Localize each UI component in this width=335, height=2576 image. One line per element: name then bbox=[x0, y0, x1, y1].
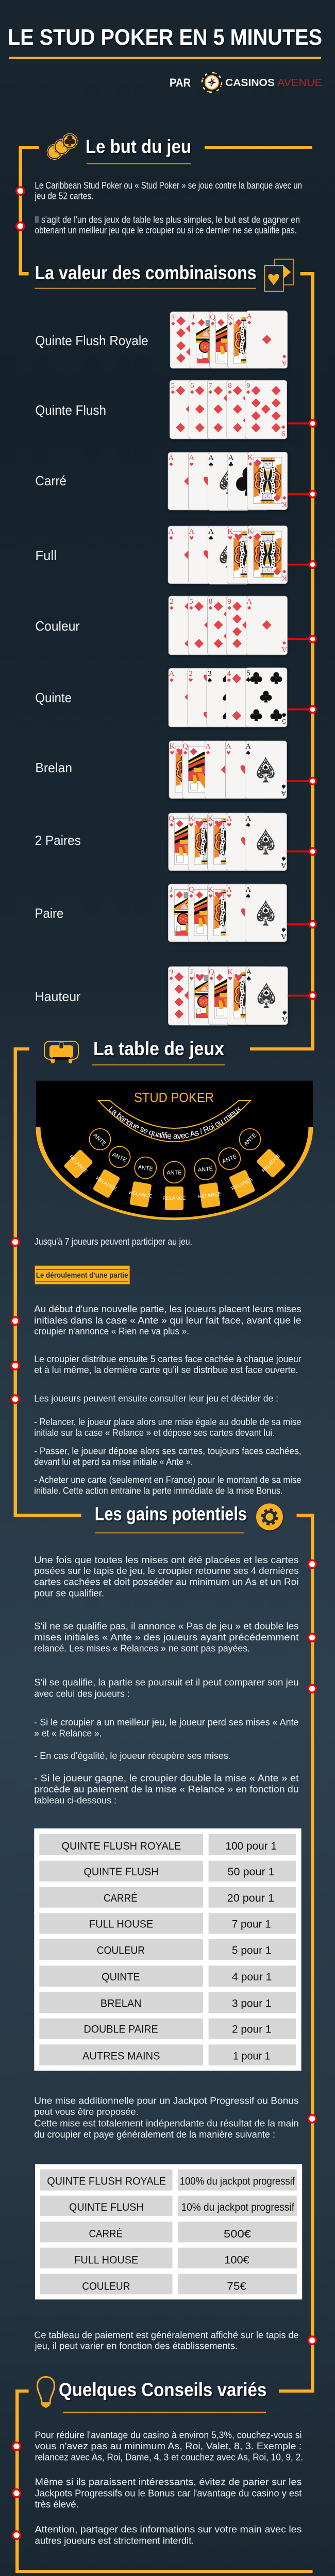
table: paiements jackpot: 500€ bbox=[224, 2228, 251, 2240]
text block: résolution: relancé. Les mises « Relances » ne sont pas payées. bbox=[34, 1643, 250, 1654]
relance boxes: RELANCE bbox=[230, 1177, 254, 1192]
hand: Quinte Flush: 8 bbox=[228, 382, 232, 390]
label: Quinte Flush Royale: Quinte Flush Royale bbox=[35, 333, 148, 348]
hand: Full: A bbox=[189, 528, 194, 536]
ante circles: ANTE bbox=[111, 1151, 127, 1163]
hand: Full: K bbox=[227, 528, 233, 536]
text block: conseils bbox=[35, 2429, 303, 2546]
table: paiements relance: 1 pour 1 bbox=[233, 2050, 270, 2062]
table: paiements relance: QUINTE FLUSH bbox=[83, 1866, 159, 1878]
relance boxes bbox=[62, 1147, 288, 1210]
hand: Brelan: A bbox=[205, 742, 211, 751]
table: paiements relance: 5 pour 1 bbox=[232, 1945, 271, 1957]
hand: Quinte Flush: 9 bbox=[246, 382, 250, 390]
heading: Quelques Conseils variés bbox=[59, 2379, 266, 2400]
hand: Carré: A bbox=[169, 454, 174, 462]
hand: Carré: K bbox=[247, 453, 253, 462]
heading underline bbox=[63, 2412, 266, 2413]
hand: Couleur: 2 bbox=[170, 598, 174, 606]
icon: poker chips bbox=[46, 133, 78, 160]
hand: Brelan: Q bbox=[182, 742, 188, 751]
hand: 2 Paires: A bbox=[226, 815, 232, 823]
hand: Hauteur: J bbox=[190, 968, 193, 976]
hand: Carré: K bbox=[281, 500, 287, 508]
table: paiements jackpot: FULL HOUSE bbox=[74, 2254, 138, 2266]
hand: Paire: A bbox=[245, 886, 251, 894]
label: 2 Paires: 2 Paires bbox=[35, 833, 81, 848]
label: Full: Full bbox=[35, 548, 57, 563]
hand: Quinte Flush bbox=[170, 380, 287, 439]
text block: déroulement: initiale sur la case « Relance » et dépose ses cartes devant lui. bbox=[34, 1427, 275, 1438]
hand: Quinte: 5 bbox=[282, 717, 286, 725]
heading underline bbox=[92, 1064, 225, 1065]
text block: résolution: cartes cachées et doit posséder au minimum un As et un Roi bbox=[34, 1577, 299, 1587]
label: Hauteur: Hauteur bbox=[35, 989, 81, 1004]
hand: Carré bbox=[168, 452, 288, 511]
hand: Couleur bbox=[169, 596, 288, 655]
table: paiements relance: AUTRES MAINS bbox=[82, 2050, 160, 2062]
text block: déroulement: - Passer, le joueur dépose alors ses cartes, toujours faces cachées, bbox=[34, 1446, 301, 1456]
hand: Quinte Flush: 7 bbox=[209, 382, 213, 390]
relance boxes: RELANCE bbox=[198, 1191, 222, 1200]
timeline nodes bbox=[11, 1238, 19, 1403]
heading underline bbox=[35, 288, 256, 289]
panel: les gains potentiels bbox=[34, 1503, 316, 2351]
hand: Full: A bbox=[169, 528, 174, 536]
relance boxes: RELANCE bbox=[68, 1154, 88, 1174]
text block: conseils: relancez avec As, Roi, Dame, 4, 3 et couchez avec As, Roi, 10, 9, 2. bbox=[35, 2452, 303, 2463]
table: paiements relance: 3 pour 1 bbox=[232, 1997, 271, 2009]
connectors and timeline nodes bbox=[287, 420, 316, 999]
hand: Full bbox=[168, 526, 288, 584]
relance boxes: RELANCE bbox=[129, 1190, 153, 1199]
table: paiements jackpot: 75€ bbox=[227, 2280, 246, 2292]
text: joueurs: Jusqu'à 7 joueurs peuvent participer au jeu. bbox=[35, 1236, 192, 1247]
label: Quinte: Quinte bbox=[35, 690, 72, 705]
hand: Full: A bbox=[208, 528, 214, 536]
ante circles: ANTE bbox=[138, 1164, 154, 1173]
table: paiements jackpot bbox=[35, 2164, 302, 2299]
text block: conseils: Jackpots Progressifs ou le Bonus car l'avantage du casino y est bbox=[35, 2487, 301, 2498]
hand: Paire: A bbox=[281, 932, 287, 940]
table: paiements relance: QUINTE FLUSH ROYALE bbox=[61, 1840, 181, 1852]
text block: conseils: Attention, partager des informations sur votre main avec les bbox=[35, 2524, 301, 2535]
table: paiements relance: 20 pour 1 bbox=[227, 1892, 274, 1904]
hand: 2 Paires: K bbox=[189, 815, 194, 823]
table: paiements relance: DOUBLE PAIRE bbox=[83, 2023, 158, 2035]
text block: résolution: Une fois que toutes les mises ont été placées et les cartes bbox=[34, 1554, 299, 1565]
hand: Quinte Flush Royale: Q bbox=[210, 313, 215, 321]
text block: résolution: S'il se qualifie, la partie se poursuit et il peut comparer son jeu bbox=[34, 1677, 299, 1688]
text block: déroulement: - Relancer, le joueur place alors une mise égale au double de sa mise bbox=[34, 1416, 301, 1427]
hand: 2 Paires: A bbox=[245, 815, 251, 823]
table: paiements relance: 7 pour 1 bbox=[232, 1919, 271, 1930]
text block: résolution: - Si le croupier a un meilleur jeu, le joueur perd ses mises « Ante bbox=[34, 1717, 299, 1727]
relance boxes: RELANCE bbox=[95, 1176, 118, 1192]
hand: Hauteur: K bbox=[227, 968, 233, 976]
hand: Paire: J bbox=[170, 886, 173, 894]
hand: Paire: Q bbox=[189, 886, 194, 894]
hand: Hauteur: 9 bbox=[170, 968, 173, 976]
table: paiements relance: 100 pour 1 bbox=[225, 1840, 277, 1852]
hand: Quinte bbox=[169, 668, 287, 727]
text block: conseils: très élevé. bbox=[35, 2499, 79, 2510]
ante circles: ANTE bbox=[92, 1132, 107, 1147]
text block: déroulement: initiales dans la case « Ante » qui leur fait face, avant que le bbox=[34, 1315, 301, 1326]
hand: Brelan: A bbox=[281, 789, 287, 797]
text block: déroulement: croupier n'annonce « Rien ne va plus ». bbox=[34, 1326, 189, 1336]
heading: La table de jeux bbox=[93, 1038, 224, 1059]
hand: Couleur: 5 bbox=[189, 598, 193, 606]
table: paiements relance bbox=[34, 1828, 301, 2071]
text block: résolution: procède au paiement de la mise « Relance » en fonction du bbox=[34, 1784, 299, 1794]
text block: résolution: - Si le joueur gagne, le croupier double la mise « Ante » et bbox=[34, 1772, 299, 1783]
hand: Quinte Flush Royale: J bbox=[192, 313, 195, 321]
title rule bbox=[9, 57, 321, 59]
text block: résolution: pour se qualifier. bbox=[34, 1588, 104, 1598]
table: paiements jackpot: 100% du jackpot progressif bbox=[180, 2176, 295, 2188]
text block: jackpot: peut vous être proposée. bbox=[34, 2106, 139, 2117]
hand: Paire: K bbox=[208, 886, 213, 894]
text block: résolution bbox=[34, 1554, 299, 1806]
text block: conseils: vous n'avez pas au minimum As, Roi, Valet, 8, 3. Exemple : bbox=[35, 2441, 301, 2451]
text block: jackpot: du croupier et paye généralement de la manière suivante : bbox=[34, 2129, 275, 2140]
text block: jeu de 52 cartes. bbox=[35, 191, 94, 201]
heading underline bbox=[87, 163, 191, 164]
hand: Paire: A bbox=[226, 886, 232, 894]
icon: gear bbox=[256, 1503, 283, 1530]
text block: affichage bbox=[34, 2329, 299, 2351]
heading: La valeur des combinaisons bbox=[35, 262, 257, 283]
hand: Quinte: A bbox=[169, 670, 175, 678]
ante circles: ANTE bbox=[243, 1132, 258, 1147]
label: Paire: Paire bbox=[35, 906, 63, 921]
table: paiements relance: FULL HOUSE bbox=[89, 1919, 153, 1930]
table: paiements relance: CARRÉ bbox=[104, 1892, 138, 1904]
label: Quinte Flush: Quinte Flush bbox=[35, 402, 106, 418]
hand: Quinte: 4 bbox=[227, 670, 231, 678]
hand: Quinte Flush Royale: 10 bbox=[171, 313, 175, 321]
hand: Quinte Flush: 6 bbox=[190, 382, 194, 390]
hand: Quinte: 3 bbox=[208, 670, 212, 678]
diagram: poker table bbox=[36, 1081, 313, 1220]
hand: Brelan: A bbox=[245, 742, 251, 751]
hand: Full: K bbox=[247, 528, 253, 536]
hand: Brelan bbox=[169, 741, 287, 799]
text block: déroulement: Au début d'une nouvelle partie, les joueurs placent leurs mises bbox=[34, 1303, 301, 1314]
panel: le but du jeu bbox=[16, 133, 302, 235]
text block: conseils: autres joueurs est strictement interdit. bbox=[35, 2535, 194, 2546]
hand: 2 Paires bbox=[169, 813, 287, 871]
hand: Hauteur bbox=[168, 967, 288, 1025]
table: paiements relance: QUINTE bbox=[102, 1971, 140, 1983]
table title: STUD POKER bbox=[134, 1090, 214, 1105]
header bbox=[8, 25, 322, 93]
text block: affichage: Ce tableau de paiement est généralement affiché sur le tapis de bbox=[34, 2329, 299, 2340]
text block: déroulement: Le croupier distribue ensuite 5 cartes face cachée à chaque joueur bbox=[34, 1353, 301, 1364]
text block: Il s'agit de l'un des jeux de table les plus simples, le but est de gagner en bbox=[35, 214, 300, 225]
brand name: CASINOS bbox=[225, 77, 275, 89]
text block: jackpot bbox=[34, 2095, 299, 2140]
relance boxes: RELANCE bbox=[163, 1196, 186, 1201]
table: paiements relance: 4 pour 1 bbox=[232, 1971, 272, 1983]
hand: Couleur: 8 bbox=[209, 598, 212, 606]
table: paiements jackpot: QUINTE FLUSH ROYALE bbox=[47, 2176, 166, 2188]
text block: résolution: posées sur le tapis de jeu, le croupier retourne ses 4 dernières bbox=[34, 1565, 299, 1576]
ante circles bbox=[85, 1124, 265, 1183]
text block: jackpot: Une mise additionnelle pour un Jackpot Progressif ou Bonus bbox=[34, 2095, 299, 2106]
text block: déroulement: devant lui et perd sa mise initiale « Ante ». bbox=[34, 1456, 193, 1467]
timeline nodes bbox=[308, 1560, 316, 2344]
text block: affichage: jeu, il peut varier en fonction des établissements. bbox=[35, 2340, 238, 2351]
text block: déroulement: et à lui même, la dernière carte qu'il se distribue est face ouverte. bbox=[34, 1364, 298, 1375]
brand name accent: AVENUE bbox=[277, 77, 322, 89]
hand: Quinte Flush Royale: A bbox=[281, 359, 287, 367]
text block: jackpot: Cette mise est totalement indépendante du résultat de la main bbox=[34, 2117, 299, 2128]
hand: 2 Paires: K bbox=[208, 815, 213, 823]
text block: déroulement: - Acheter une carte (seulement en France) pour le montant de sa mise bbox=[34, 1474, 301, 1485]
text block bbox=[35, 180, 302, 235]
heading: Les gains potentiels bbox=[95, 1503, 247, 1524]
text block: résolution: » et « Relance ». bbox=[34, 1727, 102, 1738]
text block: résolution: tableau ci-dessous : bbox=[34, 1795, 116, 1806]
table: paiements relance: COULEUR bbox=[97, 1945, 145, 1957]
hand: Couleur: A bbox=[246, 598, 252, 606]
hand: Hauteur: Q bbox=[209, 968, 214, 976]
table: paiements relance: 50 pour 1 bbox=[228, 1866, 275, 1878]
table: paiements jackpot: 10% du jackpot progressif bbox=[181, 2201, 294, 2213]
hand: Couleur: 9 bbox=[227, 598, 231, 606]
text block: résolution: - En cas d'égalité, le joueur récupère ses mises. bbox=[34, 1750, 231, 1761]
timeline nodes bbox=[12, 2443, 21, 2539]
hand: Quinte Flush Royale bbox=[170, 311, 288, 368]
timeline nodes bbox=[16, 187, 24, 230]
hand: 2 Paires: Q bbox=[169, 815, 174, 823]
qualification band: La banque se qualifie avec As / Roi ou mieux bbox=[108, 1106, 242, 1139]
ante circles: ANTE bbox=[222, 1154, 238, 1165]
heading: Le but du jeu bbox=[86, 136, 191, 157]
hand: 2 Paires: A bbox=[281, 861, 287, 869]
hand: Quinte Flush: 5 bbox=[171, 382, 175, 390]
text block: déroulement bbox=[34, 1303, 301, 1496]
ante circles: ANTE bbox=[197, 1166, 213, 1173]
callout: le déroulement d'une partie: Le déroulement d'une partie bbox=[36, 1271, 128, 1280]
table: paiements jackpot: QUINTE FLUSH bbox=[69, 2201, 144, 2213]
label: Carré: Carré bbox=[35, 473, 66, 488]
heading underline bbox=[95, 1532, 244, 1533]
hand: Quinte: 5 bbox=[246, 669, 250, 677]
relance boxes: RELANCE bbox=[261, 1153, 281, 1174]
byline: PAR bbox=[170, 76, 191, 89]
text block: conseils: Même si ils paraissent intéressants, évitez de parier sur les bbox=[35, 2477, 301, 2487]
table: paiements jackpot: COULEUR bbox=[82, 2280, 130, 2292]
hand: Paire bbox=[168, 884, 287, 942]
label: Brelan: Brelan bbox=[35, 760, 72, 775]
table: paiements jackpot: 100€ bbox=[224, 2254, 249, 2266]
icon: table bbox=[44, 1041, 78, 1063]
text block: résolution: S'il ne se qualifie pas, il annonce « Pas de jeu » et double les bbox=[34, 1620, 299, 1631]
hand: Brelan: K bbox=[170, 742, 175, 751]
hand: Quinte: 2 bbox=[189, 670, 193, 678]
text block: conseils: Pour réduire l'avantage du casino à environ 5,3%, couchez-vous si bbox=[35, 2429, 301, 2440]
table: paiements jackpot: CARRÉ bbox=[89, 2228, 123, 2240]
callout: le déroulement d'une partie bbox=[35, 1266, 130, 1284]
hand: Carré: A bbox=[228, 454, 234, 462]
hand: Full: K bbox=[281, 574, 287, 582]
hand: Carré: A bbox=[208, 454, 214, 462]
text block: résolution: avec celui des joueurs : bbox=[34, 1688, 130, 1699]
panel: la table de jeux bbox=[10, 1038, 313, 1496]
ante circles: ANTE bbox=[166, 1170, 182, 1176]
panel: quelques conseils variés bbox=[12, 2377, 303, 2546]
table: paiements relance: 2 pour 1 bbox=[232, 2023, 271, 2035]
text block: déroulement: initiale. Cette action entraine la perte immédiate de la mise Bonus. bbox=[34, 1485, 283, 1496]
text block: déroulement: Les joueurs peuvent ensuite consulter leur jeu et décider de : bbox=[34, 1393, 278, 1404]
icon: casino chip logo bbox=[201, 72, 223, 93]
hand: Couleur: A bbox=[281, 645, 287, 653]
panel: la valeur des combinaisons bbox=[35, 259, 316, 1025]
text block: résolution: mises initiales « Ante » des joueurs ayant précédemment bbox=[34, 1632, 299, 1642]
hand: Quinte Flush: 9 bbox=[281, 429, 285, 437]
icon: light bulb bbox=[37, 2377, 55, 2408]
hand: Hauteur: A bbox=[246, 968, 252, 976]
hand: Carré: A bbox=[189, 454, 194, 462]
hand: Quinte Flush Royale: A bbox=[246, 312, 252, 320]
hand: Brelan: A bbox=[226, 742, 231, 751]
hand: Quinte Flush Royale: K bbox=[228, 313, 233, 321]
hand: Hauteur: A bbox=[282, 1015, 288, 1023]
table: paiements relance: BRELAN bbox=[100, 1997, 141, 2009]
icon: playing cards bbox=[265, 259, 293, 292]
label: Couleur: Couleur bbox=[35, 618, 80, 634]
